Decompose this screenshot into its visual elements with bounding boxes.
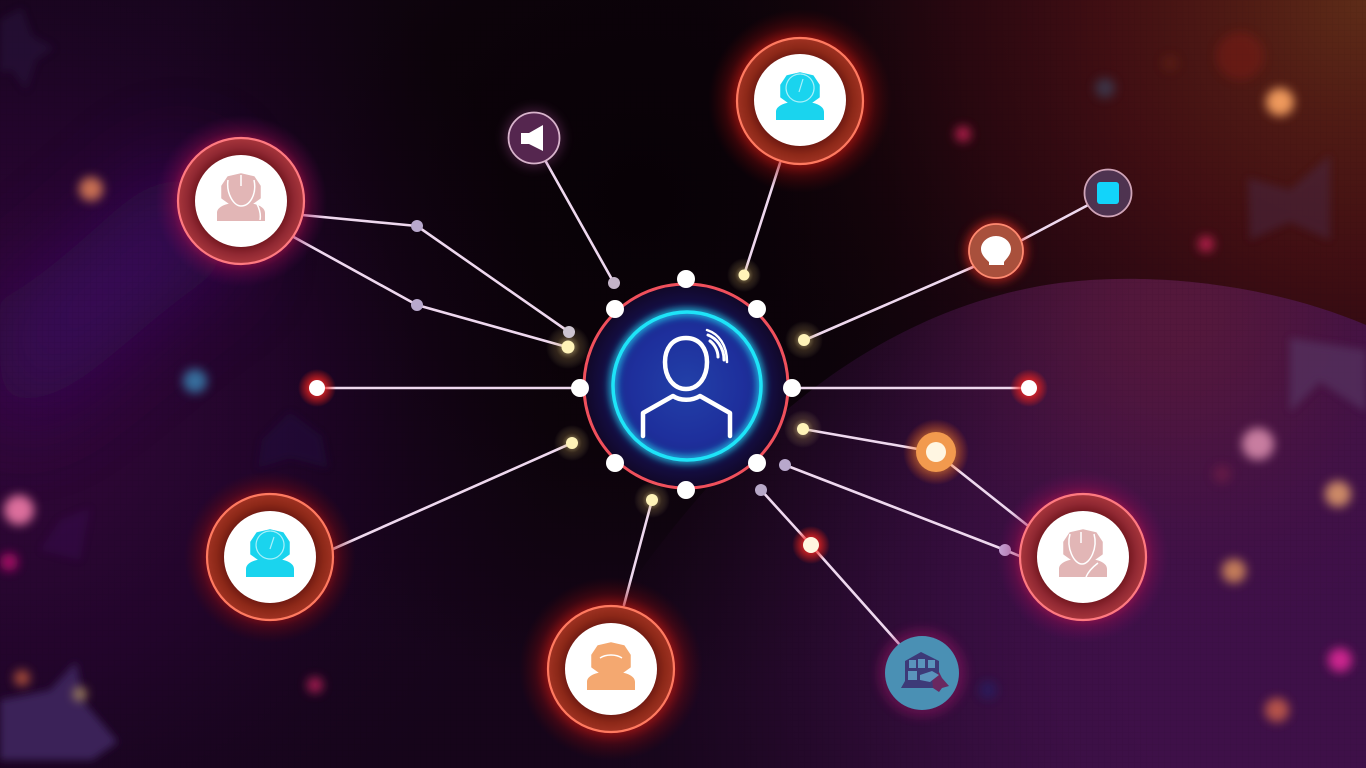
node: speaker icon — [504, 108, 564, 168]
node: right pink person — [997, 471, 1169, 643]
icon: person with signal waves — [643, 330, 730, 436]
node: cyan square icon — [1084, 170, 1132, 216]
connector end dots — [298, 220, 1048, 564]
node: light bulb icon — [965, 220, 1027, 282]
node: lower left cyan person — [184, 471, 356, 643]
node: teal building icon — [878, 629, 966, 717]
node: upper left pink person — [155, 115, 327, 287]
connector lines — [290, 160, 1090, 645]
node: bottom orange person — [519, 577, 703, 761]
central hub — [584, 284, 788, 488]
hub nodes — [571, 270, 801, 499]
node: orange dot — [903, 419, 969, 485]
node: top cyan person — [708, 9, 892, 193]
